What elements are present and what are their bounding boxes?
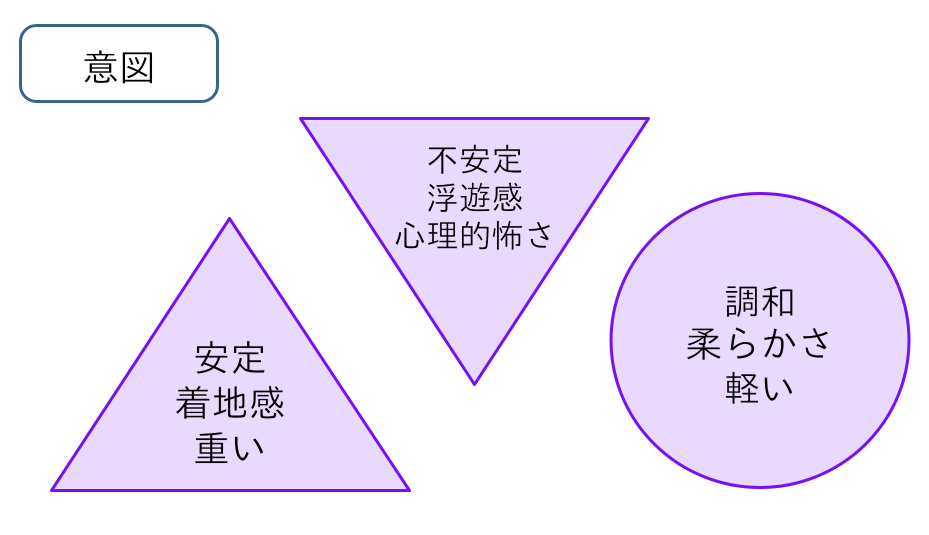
circle: harmony: 軽い [724, 370, 796, 406]
upright triangle: stability: 重い [193, 430, 267, 466]
inverted triangle: instability: 浮遊感 [426, 180, 524, 214]
circle: harmony [611, 194, 909, 488]
inverted triangle: instability [300, 118, 648, 384]
circle: harmony: 柔らかさ [685, 324, 835, 362]
upright triangle: stability: 着地感 [174, 384, 286, 422]
title box: 意図 [82, 49, 156, 86]
upright triangle: stability [52, 218, 410, 490]
inverted triangle: instability: 不安定 [426, 142, 524, 176]
inverted triangle: instability: 心理的怖さ [394, 218, 556, 252]
title box [20, 26, 218, 102]
circle: harmony: 調和 [724, 284, 796, 320]
upright triangle: stability: 安定 [193, 340, 267, 376]
